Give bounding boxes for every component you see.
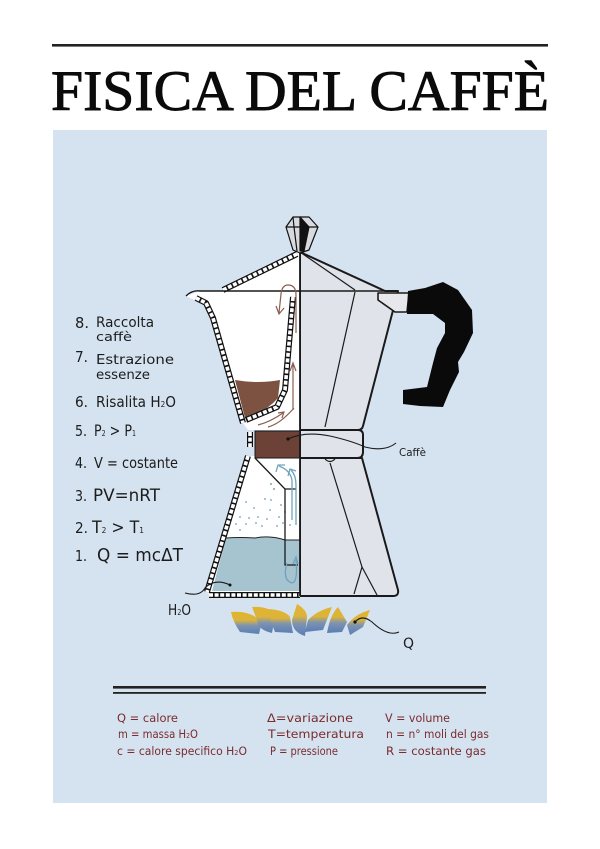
legend: symbols: m = massa H2O: [118, 727, 198, 741]
label: H2O: H2O: [168, 601, 191, 619]
legend: symbols: Q = calore: [117, 711, 178, 725]
knob: [286, 217, 318, 253]
process steps list: PV=nRT: [93, 486, 161, 506]
process steps list: caffè: [96, 330, 132, 344]
process steps list: [75, 314, 184, 566]
legend: symbols: P = pressione: [270, 744, 338, 758]
flame: [231, 604, 370, 636]
process steps list: 5.: [75, 422, 87, 440]
grey right half of pot: [300, 252, 409, 596]
process steps list: 2.: [75, 519, 88, 537]
process steps list: V = costante: [94, 454, 178, 472]
legend: symbols: c = calore specifico H2O: [117, 744, 247, 758]
handle: [403, 282, 473, 407]
ground coffee filter: [255, 431, 300, 458]
process steps list: Raccolta: [96, 315, 154, 331]
legend: symbols: Δ=variazione: [267, 711, 353, 725]
process steps list: Risalita H2O: [96, 393, 176, 411]
process steps list: 1.: [75, 547, 87, 565]
coffee in upper chamber: [235, 380, 280, 418]
panel: illustration background: [53, 130, 547, 803]
process steps list: 6.: [75, 393, 88, 411]
leader lines: [185, 434, 399, 633]
process steps list: 8.: [75, 314, 89, 332]
process steps list: 4.: [75, 454, 87, 472]
title: FISICA DEL CAFFÈ: [51, 60, 549, 123]
legend: symbols: n = n° moli del gas: [386, 727, 489, 741]
legend: symbols: T=temperatura: [267, 727, 364, 741]
water in boiler: [212, 537, 300, 591]
steam droplets: [235, 483, 291, 531]
white lower chamber interior: [207, 456, 300, 594]
outer walls with hatching: [196, 254, 300, 595]
white upper chamber interior: [186, 252, 300, 430]
process steps list: P2 > P1: [94, 421, 136, 440]
rising water arrows: [276, 465, 298, 583]
rising coffee arrows: [258, 285, 296, 427]
process steps list: 7.: [75, 348, 88, 366]
label: Q: Q: [403, 636, 414, 652]
centre line: [299, 252, 301, 596]
process steps list: essenze: [96, 368, 150, 383]
process steps list: Estrazione: [96, 353, 174, 368]
process steps list: Q = mcΔT: [97, 545, 184, 566]
legend: symbols: R = costante gas: [386, 744, 486, 758]
moka pot illustration: [186, 217, 473, 596]
process steps list: T2 > T1: [91, 518, 144, 538]
legend: symbols: V = volume: [385, 711, 450, 725]
legend: symbols: [117, 711, 489, 758]
lid rim line and spout lip: [186, 291, 398, 296]
funnel and tube: [255, 458, 298, 565]
label: Caffè: Caffè: [399, 446, 426, 459]
process steps list: 3.: [75, 487, 87, 505]
